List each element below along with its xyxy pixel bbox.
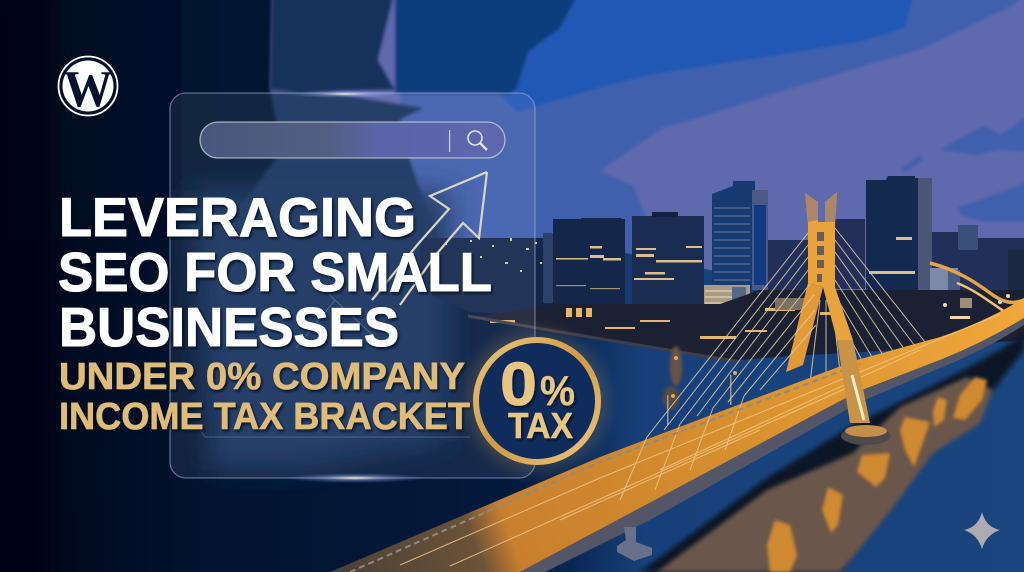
background: river and left fade [0,240,1024,572]
title [58,186,492,358]
bridge cables [647,228,925,437]
dark water under bridge [640,335,1024,572]
title: BUSINESSES [59,296,399,358]
icon: sparkle [964,512,1000,549]
badge: 0% tax: TAX [508,405,573,446]
water reflections [640,335,1024,572]
panel backdrop blend [190,190,450,470]
badge: 0% tax [465,329,609,473]
bridge pier [617,527,652,561]
bridge tower left leg [786,283,823,372]
search divider [449,130,450,152]
building 5 [835,219,865,289]
waterfront land with lights [468,290,1024,362]
search bar [200,122,505,158]
inner card line [200,430,470,437]
title: LEVERAGING [59,186,416,248]
title: SEO FOR SMALL [58,241,492,303]
badge: 0% tax: % [540,367,575,414]
icon: magnifier [468,131,487,150]
distant skyline [420,225,1024,318]
subtitle [59,356,470,438]
bridge tower [805,192,891,445]
background: dark left area [0,0,282,262]
building 3 [704,181,768,315]
glass search panel [170,90,535,483]
icon: WordPress logo: W [64,61,112,118]
brown reflection [657,377,993,572]
icon: growth arrow [296,172,487,348]
city road curve with lights [930,263,1024,319]
bridge deck [330,298,1024,572]
subtitle: INCOME TAX BRACKET [59,396,470,438]
left edge shading [0,0,50,572]
panel bottom glow [285,473,425,483]
building 2 [632,212,704,322]
panel top glow [285,90,405,98]
building 4 [866,176,960,320]
lamp reflections [670,346,682,386]
orange reflections [767,377,987,572]
building 1 [553,218,625,317]
subtitle: UNDER 0% COMPANY [59,356,465,398]
background: night sky [0,0,1024,350]
badge: 0% tax: 0 [500,350,537,418]
